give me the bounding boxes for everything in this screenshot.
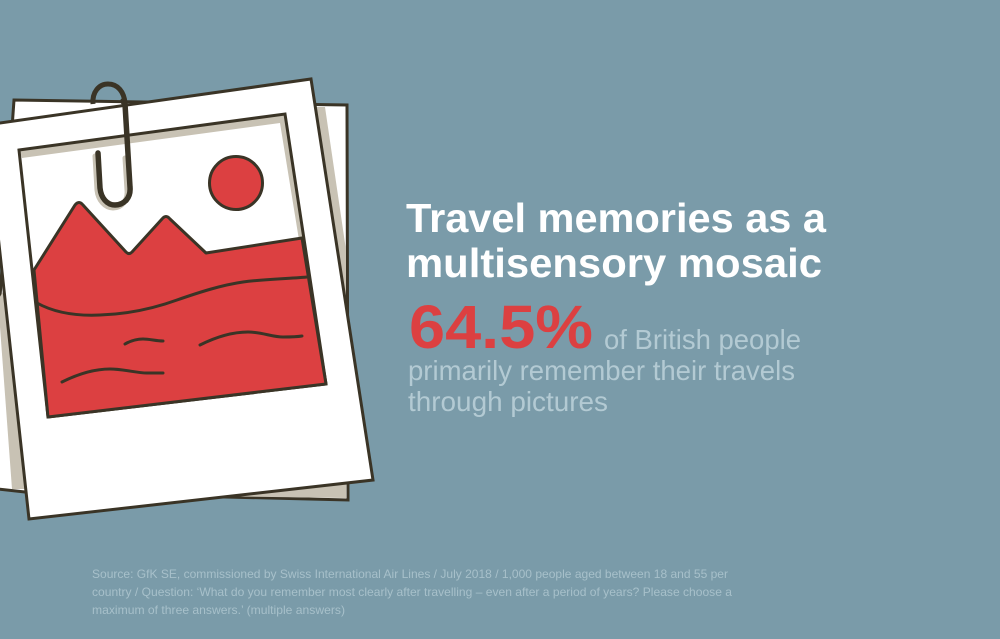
statistic description: of British people (604, 324, 801, 355)
front photo sheet (0, 79, 373, 519)
heading: Travel memories as a (406, 195, 827, 241)
small waves (62, 332, 302, 382)
statistic: 64.5%: 64.5% (409, 293, 593, 361)
statistic description (408, 324, 801, 417)
source note: maximum of three answers.’ (multiple answers) (92, 604, 345, 617)
heading (406, 195, 827, 286)
sun (210, 156, 262, 210)
statistic description: through pictures (408, 386, 608, 417)
source note (92, 568, 733, 617)
illustration: stacked photos with paper clip (0, 79, 373, 519)
horizon wave (37, 277, 307, 315)
source note: Source: GfK SE, commissioned by Swiss International Air Lines / July 2018 / 1,000 people aged between 18 and 55 per (92, 568, 728, 581)
paper clip (95, 101, 130, 208)
statistic description: primarily remember their travels (408, 355, 795, 386)
paper clip back loop (93, 84, 125, 104)
back photo sheet (0, 100, 348, 500)
photo frame (19, 114, 326, 417)
heading: multisensory mosaic (406, 240, 822, 286)
source note: country / Question: ‘What do you remember most clearly after travelling – even after a period of years? Please choose a (92, 586, 733, 599)
mountains and sea (34, 202, 326, 417)
